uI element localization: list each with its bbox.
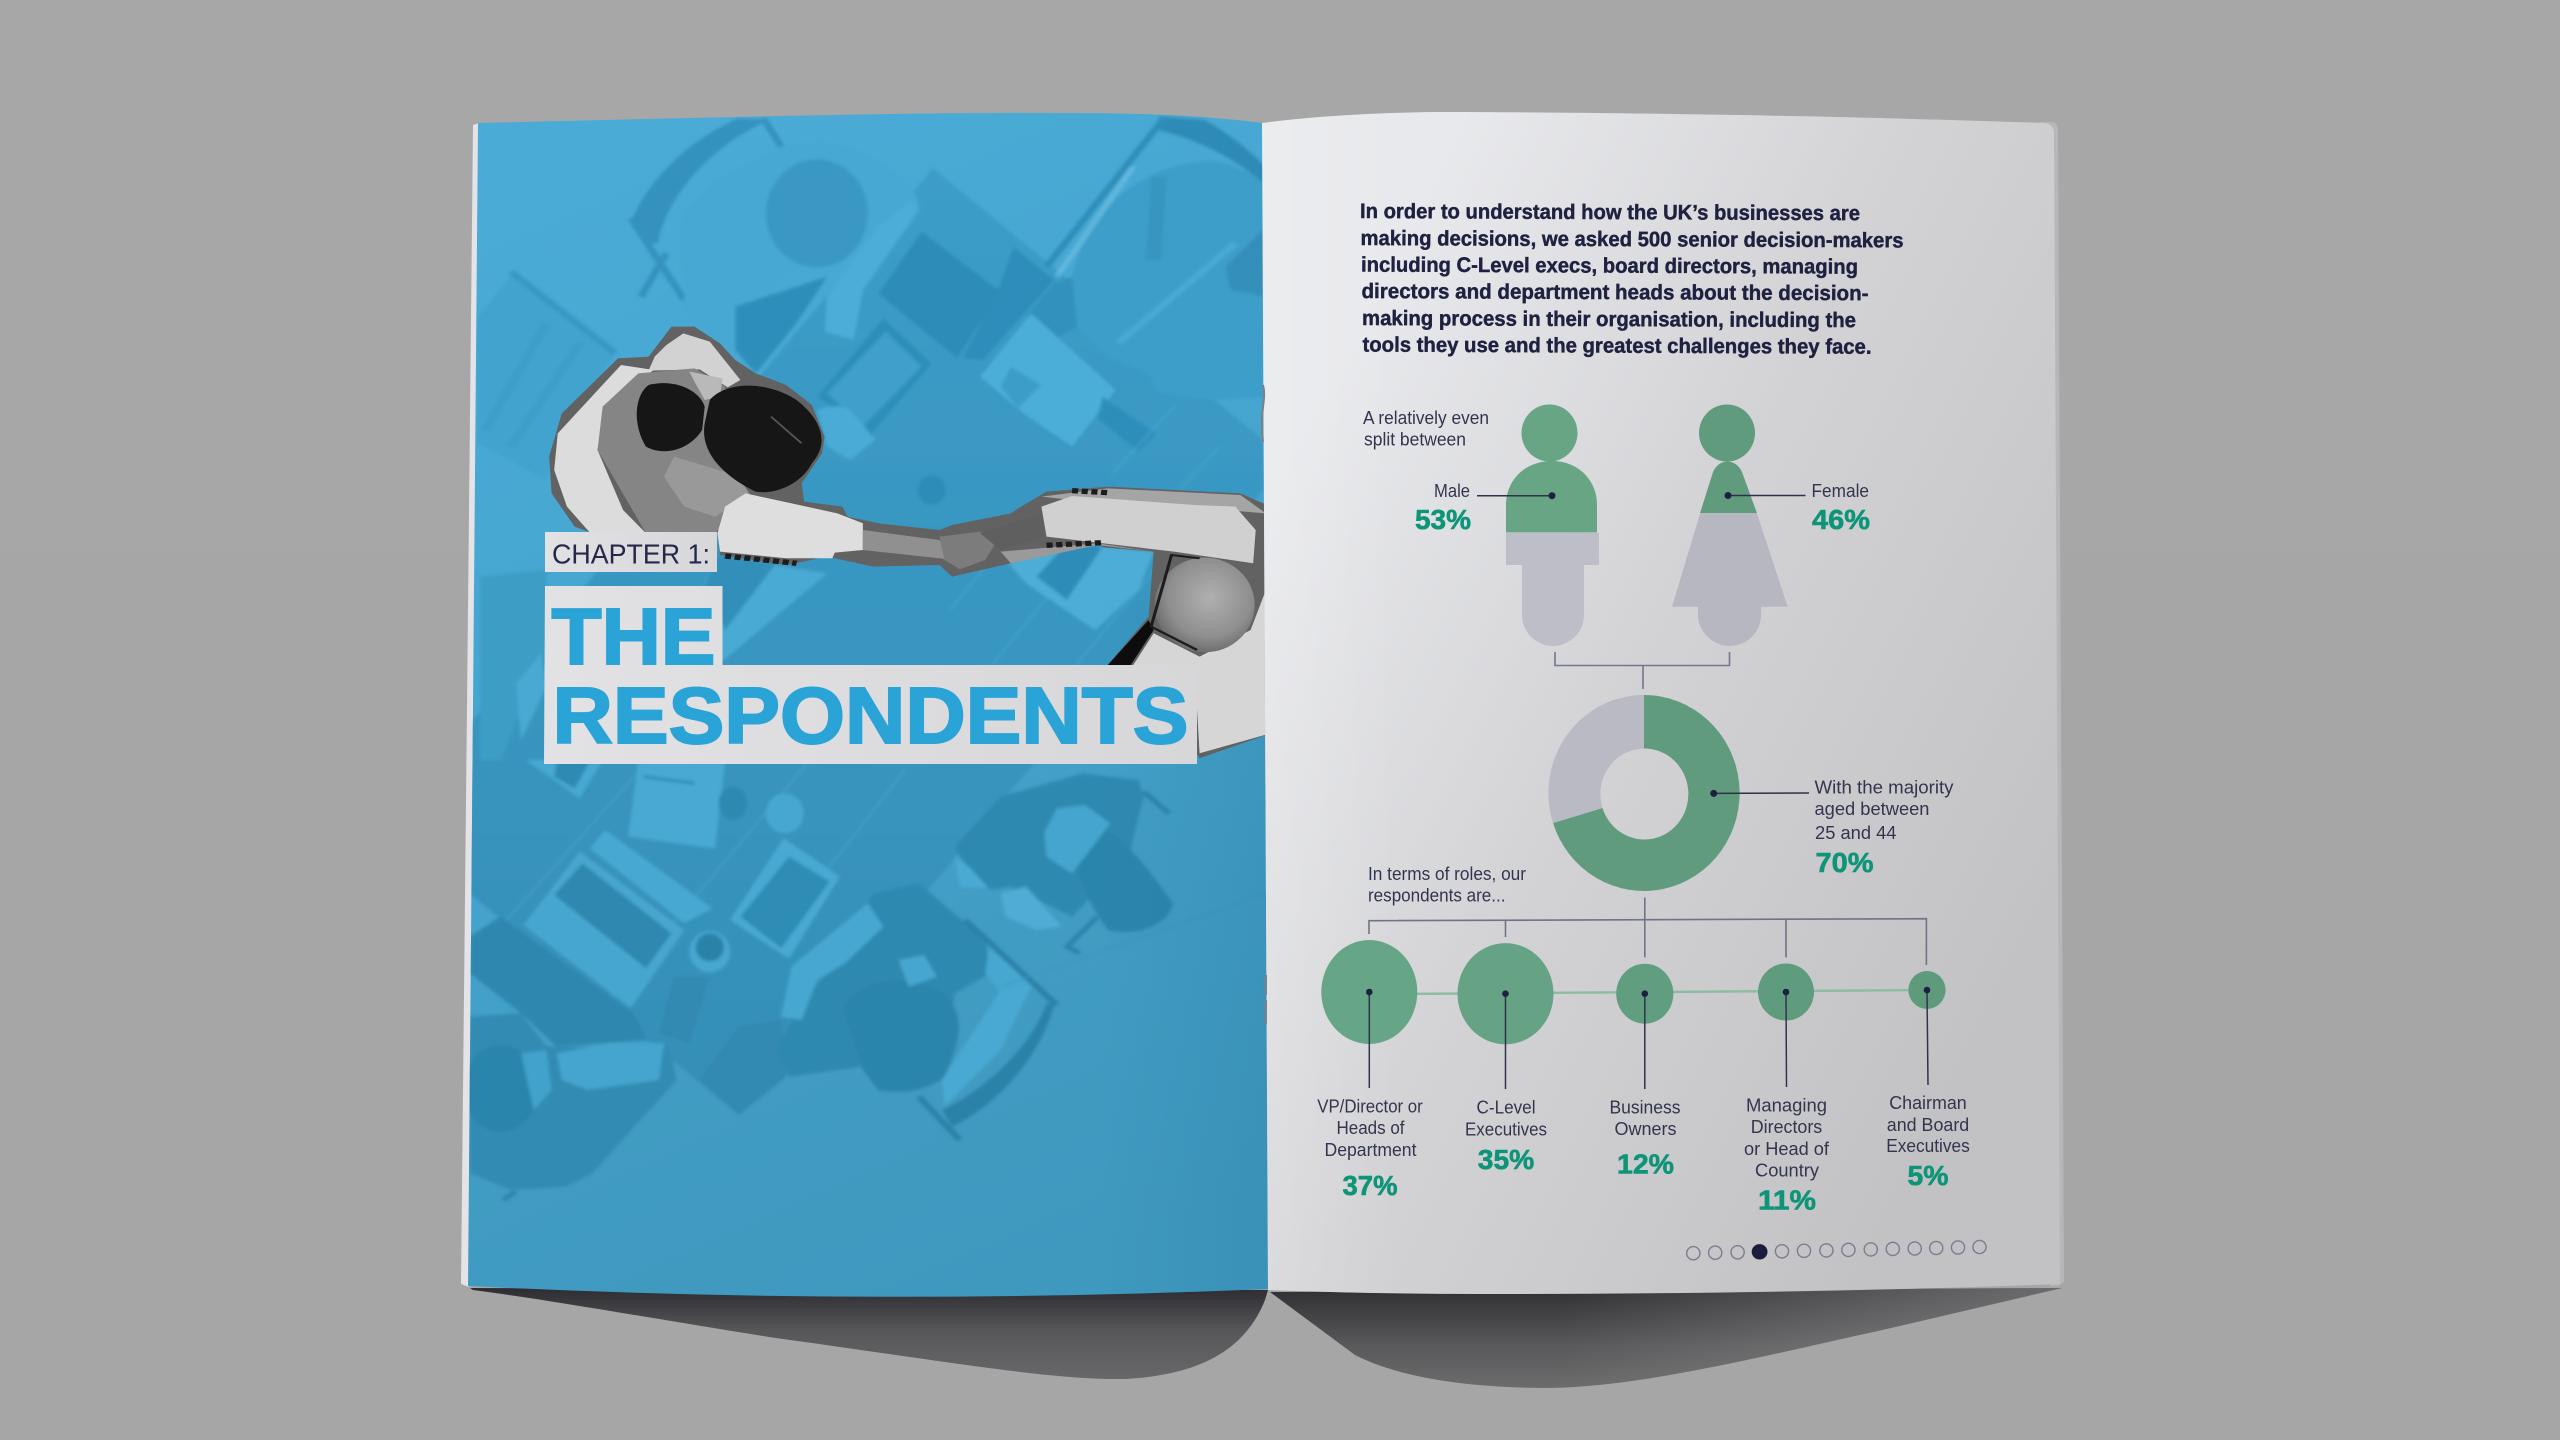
tablet — [817, 318, 932, 435]
roles intro text — [1368, 864, 1526, 906]
spine glow — [1262, 112, 1440, 1294]
title: THE RESPONDENTS — [544, 586, 1197, 764]
hands — [781, 903, 883, 1020]
role label: C-Level 35%: C-Level — [1476, 1098, 1536, 1118]
intro paragraph: including C-Level execs, board directors, managing — [1361, 254, 1858, 279]
role label: Business Owners 12%: Owners — [1614, 1119, 1676, 1139]
role label: Chairman 5%: and Board — [1887, 1115, 1969, 1135]
collar highlight — [689, 372, 723, 400]
tablet — [730, 838, 840, 958]
bubble connector line — [1400, 990, 1927, 994]
page sheet — [1262, 112, 2060, 1294]
keyboard pattern bits — [725, 491, 1108, 563]
donut label — [1814, 778, 1954, 878]
upper cardigan — [649, 333, 740, 387]
role label: Chairman 5%: Chairman — [1889, 1093, 1967, 1113]
role label: Managing Directors 11%: Directors — [1751, 1117, 1822, 1137]
forearm — [863, 530, 955, 560]
curly hair — [862, 1007, 960, 1092]
table planks — [480, 500, 1225, 1010]
man's forearm — [980, 513, 1044, 550]
phone — [659, 977, 710, 1043]
role label: Managing Directors 11%: or Head of — [1744, 1139, 1830, 1159]
bracket connector — [1555, 652, 1730, 689]
hair parting — [771, 417, 802, 443]
gender split intro text — [1363, 408, 1489, 450]
donut label: aged between — [1814, 799, 1930, 819]
glasses — [1151, 555, 1200, 650]
hair — [462, 1045, 539, 1132]
man's bald head — [1155, 558, 1255, 652]
male label: 53% — [1415, 504, 1471, 535]
left cardigan — [554, 365, 654, 533]
panel: right page — [1262, 112, 2064, 1294]
role label: Chairman 5%: Executives — [1886, 1136, 1970, 1156]
intro paragraph: tools they use and the greatest challenges they face. — [1362, 334, 1872, 359]
role label: Managing Directors 11%: Managing — [1746, 1096, 1827, 1116]
dark object near table end — [744, 1064, 786, 1110]
icon: male figure 53% — [1477, 404, 1599, 646]
role label: Business Owners 12%: Business — [1610, 1098, 1680, 1118]
role label: Business Owners 12%: 12% — [1617, 1148, 1674, 1180]
role label: Managing Directors 11% — [1744, 1096, 1830, 1216]
wooden table — [470, 168, 1275, 1115]
gender split intro text: split between — [1364, 430, 1466, 450]
role label: VP/Director 37%: Department — [1324, 1140, 1416, 1160]
dark laptop — [878, 232, 1001, 358]
role label: C-Level 35% — [1465, 1098, 1547, 1175]
man's shirt — [1133, 577, 1271, 753]
tie — [1108, 620, 1154, 665]
photo: handshake cutout in greyscale — [549, 327, 1271, 758]
duotone office scene — [462, 117, 1275, 1200]
hair — [1075, 820, 1173, 932]
paper — [628, 760, 725, 848]
grey strip below sleeve — [1001, 543, 1154, 563]
head at top — [766, 159, 868, 267]
intro paragraph: making process in their organisation, including the — [1362, 307, 1856, 332]
intro paragraph — [1360, 200, 1904, 359]
top person arm and hand — [824, 246, 870, 334]
sleeve — [717, 493, 863, 558]
shadow under right page — [1270, 1288, 2062, 1388]
upper scene — [478, 117, 1271, 505]
hair knot — [637, 383, 705, 451]
middle scene — [480, 540, 1154, 760]
role label: Chairman 5%: 5% — [1908, 1160, 1949, 1191]
female label: Female — [1812, 481, 1869, 501]
donut label: 25 and 44 — [1815, 823, 1896, 843]
role label: VP/Director 37% — [1317, 1096, 1423, 1201]
face — [899, 955, 937, 987]
cup 2 — [689, 931, 730, 972]
chapter label: CHAPTER 1: — [552, 538, 710, 570]
title: THE RESPONDENTS: THE — [552, 592, 716, 681]
laptop left under handshake — [722, 566, 825, 662]
bubble chart: roles — [1321, 940, 1946, 1089]
left chair — [486, 282, 510, 312]
shadow under left page — [470, 1288, 1268, 1379]
male label: Male — [1434, 481, 1470, 501]
chest highlight — [664, 457, 751, 517]
coffee cup — [766, 793, 804, 833]
role label: VP/Director 37%: 37% — [1342, 1170, 1398, 1201]
donut chart: 70% aged 25-44 — [1548, 695, 1809, 891]
roles connector tree — [1369, 898, 1926, 965]
role label: VP/Director 37%: Heads of — [1336, 1118, 1405, 1138]
intro paragraph: making decisions, we asked 500 senior decision-makers — [1360, 227, 1904, 252]
female label — [1812, 481, 1870, 535]
role label: C-Level 35%: Executives — [1465, 1120, 1547, 1140]
chair 3 — [965, 920, 1057, 1005]
role label: Chairman 5% — [1886, 1093, 1970, 1191]
intro paragraph: directors and department heads about the decision- — [1361, 280, 1869, 305]
face — [1044, 805, 1110, 873]
dark shadow — [735, 277, 827, 373]
spine darkening — [1100, 600, 1275, 1310]
pagination dots — [1687, 1240, 1986, 1260]
page thickness edge — [2040, 122, 2064, 1286]
icon: female figure 46% — [1672, 404, 1806, 646]
role label: VP/Director 37%: VP/Director or — [1317, 1096, 1423, 1116]
panel: left page cover photo — [460, 100, 1280, 1310]
role label: Managing Directors 11%: 11% — [1758, 1184, 1816, 1216]
woman's torso — [598, 368, 751, 533]
grey table above man's sleeve — [1041, 488, 1266, 513]
hands — [557, 1043, 664, 1090]
man's sleeve — [1041, 496, 1256, 563]
person at top: shirt — [684, 194, 917, 298]
roles intro text: respondents are... — [1368, 886, 1506, 906]
plant — [718, 787, 747, 820]
role label: Managing Directors 11%: Country — [1755, 1160, 1819, 1180]
person curly shirt — [776, 883, 990, 1080]
donut label: With the majority — [1814, 778, 1954, 798]
role label: C-Level 35%: 35% — [1478, 1144, 1534, 1175]
white chair seat — [984, 949, 1030, 990]
hair head — [704, 386, 822, 492]
laptop below handshake — [1009, 547, 1153, 630]
left lower dim area — [480, 570, 547, 760]
role label: Business Owners 12% — [1610, 1098, 1680, 1180]
female label: 46% — [1812, 504, 1870, 535]
right person — [1072, 161, 1271, 400]
coffee ring mark — [919, 476, 944, 504]
top chair — [632, 118, 768, 243]
donut label: 70% — [1816, 847, 1874, 878]
male label — [1415, 481, 1471, 535]
tablet top — [526, 760, 603, 798]
light laptop — [980, 313, 1115, 447]
left page white edge — [461, 123, 479, 1287]
dark laptop lower left — [470, 917, 649, 1047]
sleeve — [1001, 887, 1062, 930]
plank lines — [1135, 430, 1152, 450]
clasped hands — [939, 532, 996, 569]
lower-left person — [470, 1013, 677, 1190]
floor line right — [1001, 893, 1266, 987]
right chair — [1159, 116, 1262, 182]
title: THE RESPONDENTS: RESPONDENTS — [552, 671, 1188, 760]
hand on tablet — [817, 406, 876, 460]
phone — [1098, 397, 1154, 449]
gender split intro text: A relatively even — [1363, 408, 1489, 428]
roles intro text: In terms of roles, our — [1368, 864, 1526, 884]
cutout silhouette — [549, 327, 1271, 758]
stitches — [1262, 385, 1266, 1024]
intro paragraph: In order to understand how the UK’s businesses are — [1360, 200, 1860, 225]
upper-right person shirt — [955, 773, 1143, 917]
lower scene — [469, 760, 1173, 1201]
laptop keyboard half — [524, 852, 684, 1008]
